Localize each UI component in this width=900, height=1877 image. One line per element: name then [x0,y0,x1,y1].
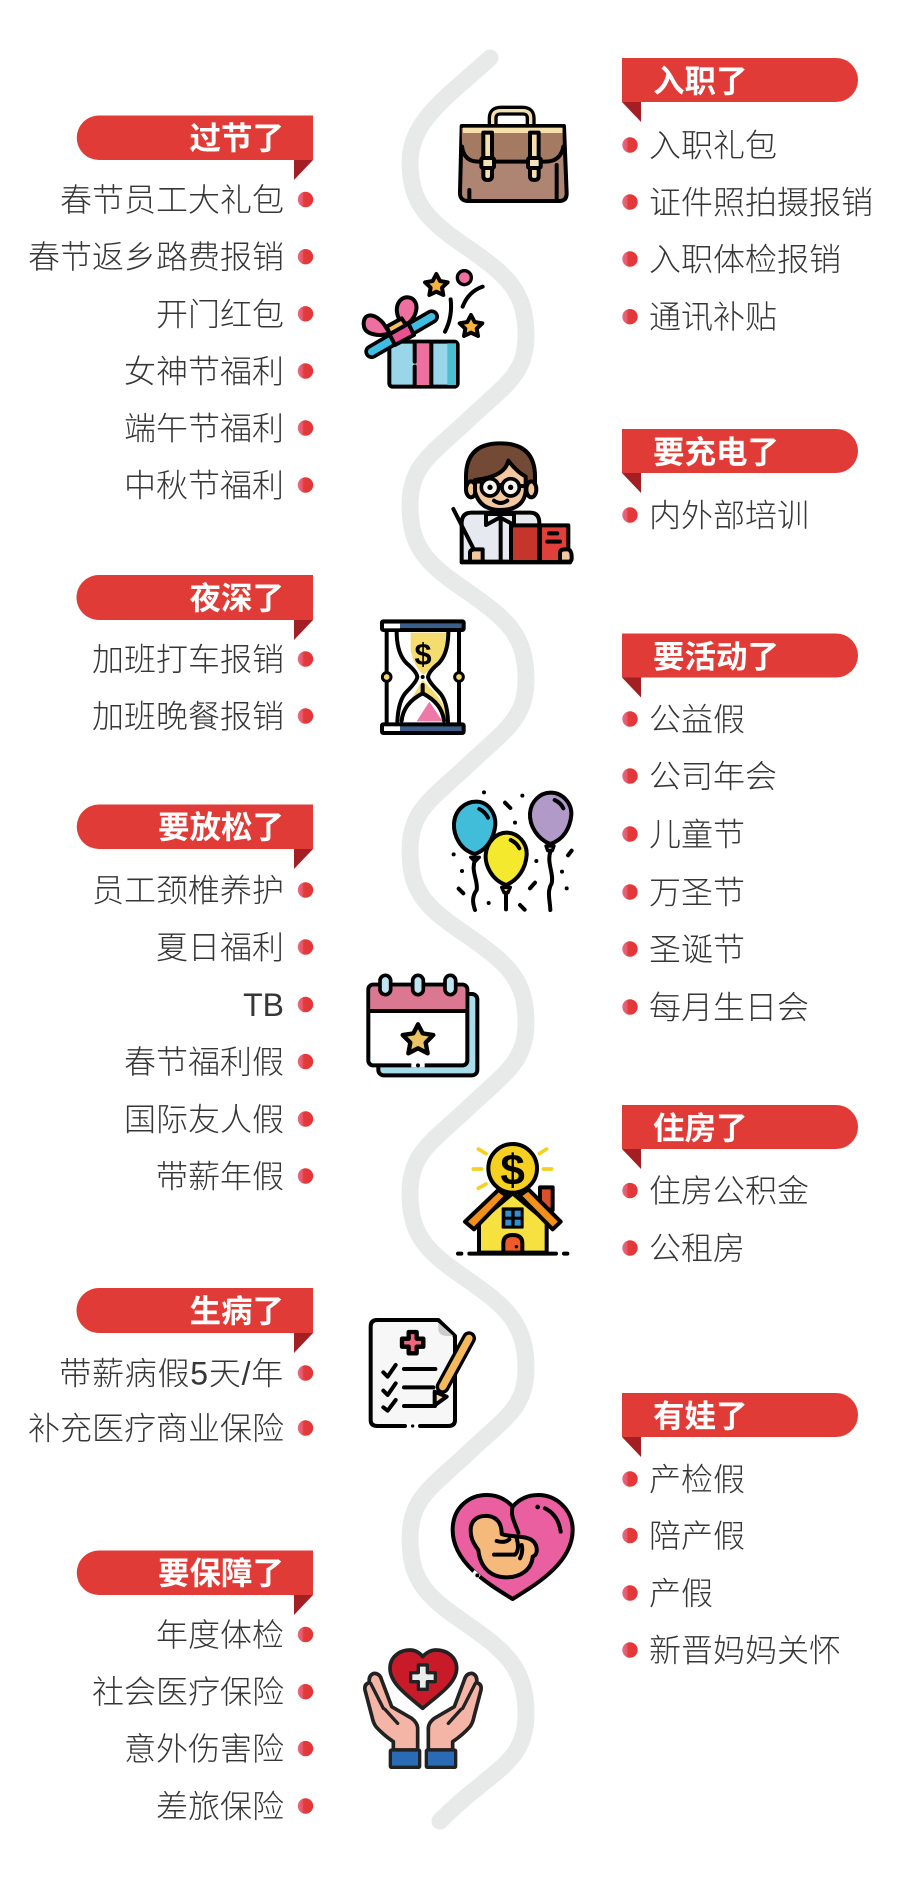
banner: 有娃了: 有娃了 [653,1398,748,1434]
item list: 过节了: 女神节福利 [124,354,284,390]
icon: hourglass: $ [414,637,432,671]
item list: 夜深了: 加班晚餐报销 [92,698,284,734]
item list: 要充电了: 内外部培训 [649,498,809,534]
item list: 有娃了: 产检假 [649,1462,745,1498]
panel: 夜深了 [76,575,313,734]
icon: hourglass [382,621,464,733]
banner: 生病了 [76,1288,313,1353]
icon: calendar with star [368,975,477,1075]
item list: 要活动了: 儿童节 [649,816,745,852]
icon: briefcase [460,111,567,201]
icon: gift box [364,271,483,387]
icon: medical form with pencil [371,1320,469,1428]
item list: 入职了 [622,128,873,335]
item list: 入职了: 入职礼包 [649,128,777,164]
panel: 住房了 [622,1105,858,1266]
item list: 住房了 [622,1173,809,1266]
banner: 过节了 [77,116,313,180]
item list: 生病了: 带薪病假5天/年 [59,1356,284,1392]
banner: 要放松了 [77,804,313,869]
panel: 生病了 [28,1288,313,1446]
item list: 要活动了: 万圣节 [649,874,745,910]
item list: 要保障了: 社会医疗保险 [92,1674,284,1710]
banner: 过节了: 过节了 [189,120,284,156]
banner: 要放松了: 要放松了 [158,809,284,845]
item list: 入职了: 通讯补贴 [649,299,777,335]
item list: 过节了: 春节返乡路费报销 [28,239,284,275]
item list: 过节了: 春节员工大礼包 [60,182,284,218]
item list: 要活动了: 公司年会 [649,758,777,794]
item list: 要活动了: 每月生日会 [649,990,809,1026]
item list: 有娃了: 陪产假 [649,1518,745,1554]
item list: 要放松了: 春节福利假 [124,1044,284,1080]
banner: 要充电了: 要充电了 [653,434,779,470]
item list: 要活动了: 公益假 [649,702,745,738]
icon: teacher with book [453,443,572,562]
item list: 要保障了: 意外伤害险 [124,1731,284,1767]
icon: house with coin: $ [500,1146,525,1195]
item list: 要活动了: 圣诞节 [649,932,745,968]
banner: 要活动了 [622,634,858,698]
item list: 生病了 [28,1356,313,1446]
item list: 要活动了 [622,702,809,1026]
item list: 住房了: 住房公积金 [649,1173,809,1209]
icon: heart with embryo [453,1495,573,1599]
item list: 过节了: 中秋节福利 [124,468,284,504]
item list: 生病了: 补充医疗商业保险 [28,1410,284,1446]
panel: 入职了 [622,58,873,335]
item list: 要保障了: 年度体检 [156,1617,284,1653]
item list: 要放松了 [92,872,313,1194]
item list: 要放松了: 员工颈椎养护 [92,872,284,908]
banner: 夜深了 [76,575,313,640]
panel: 要保障了 [77,1550,313,1824]
icon: hands holding heart [365,1650,481,1767]
panel: 要放松了 [77,804,313,1194]
item list: 要保障了 [92,1617,313,1824]
panel: 要充电了 [622,429,858,534]
item list: 要放松了: 带薪年假 [156,1158,284,1194]
item list: 入职了: 入职体检报销 [649,242,841,278]
banner: 要活动了: 要活动了 [653,638,779,674]
banner: 要保障了: 要保障了 [158,1555,284,1591]
banner: 住房了: 住房了 [653,1110,748,1146]
item list: 要保障了: 差旅保险 [156,1788,284,1824]
panel: 有娃了 [622,1393,858,1668]
item list: 要放松了: 国际友人假 [124,1102,284,1138]
banner: 入职了: 入职了 [653,63,748,99]
banner: 入职了 [622,58,858,122]
item list: 过节了 [28,182,313,504]
item list: 夜深了: 加班打车报销 [92,642,284,678]
item list: 过节了: 开门红包 [156,296,284,332]
panel: 要活动了 [622,634,858,1026]
item list: 要放松了: TB [243,987,284,1023]
item list: 住房了: 公租房 [649,1230,745,1266]
banner: 要充电了 [622,429,858,493]
icon: house with coin [458,1144,567,1254]
item list: 有娃了: 产假 [649,1576,713,1612]
panel: 过节了 [28,116,313,504]
item list: 夜深了 [92,642,313,734]
banner: 夜深了: 夜深了 [189,580,284,616]
winding timeline path [410,58,526,1821]
banner: 生病了: 生病了 [189,1293,284,1329]
item list: 过节了: 端午节福利 [124,410,284,446]
banner: 住房了 [622,1105,858,1169]
banner: 有娃了 [622,1393,858,1457]
item list: 要放松了: 夏日福利 [156,930,284,966]
item list: 有娃了: 新晋妈妈关怀 [649,1632,841,1668]
item list: 有娃了 [622,1462,841,1668]
item list: 入职了: 证件照拍摄报销 [649,184,873,220]
banner: 要保障了 [77,1550,313,1615]
icon: balloons [452,790,572,910]
